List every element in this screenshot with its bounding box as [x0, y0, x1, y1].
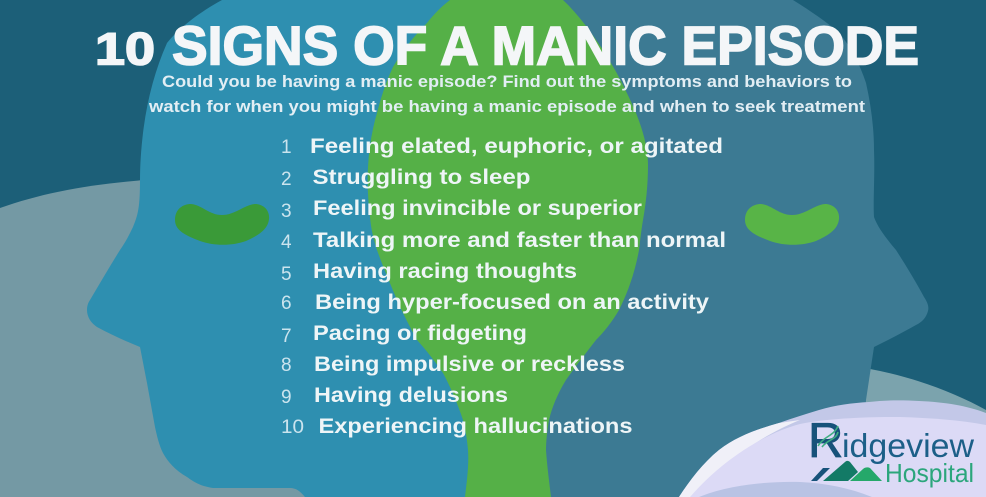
left head silhouette [87, 0, 470, 497]
list of signs: Experiencing hallucinations [318, 414, 633, 438]
list of signs: Being impulsive or reckless [314, 352, 625, 376]
left eye [175, 204, 269, 245]
list numbers: 5 [281, 264, 292, 285]
logo peak two [850, 467, 882, 481]
logo: Ridgeview Hospital [808, 414, 974, 488]
list of signs: Feeling elated, euphoric, or agitated [310, 134, 723, 158]
list numbers: 9 [281, 387, 292, 408]
list numbers: 1 [281, 137, 292, 158]
list numbers: 7 [281, 326, 292, 347]
green centre head overlap [368, 0, 648, 497]
list numbers: 2 [281, 169, 292, 190]
logo peak one [823, 461, 858, 481]
list of signs: Feeling invincible or superior [313, 196, 643, 220]
intro text: watch for when you might be having a manic episode and when to seek treatment [148, 97, 865, 116]
list numbers: 6 [281, 293, 292, 314]
title number: 10 [95, 24, 155, 74]
list numbers [281, 137, 304, 438]
list numbers: 8 [281, 355, 292, 376]
list numbers: 10 [281, 417, 304, 438]
intro text [148, 72, 865, 116]
right head silhouette [500, 0, 928, 497]
logo wordmark: idgeview [842, 427, 974, 464]
logo backdrop curves [679, 400, 986, 497]
logo letter R: R [808, 414, 843, 468]
list numbers: 4 [281, 232, 292, 253]
title words: SIGNS OF A MANIC EPISODE [172, 14, 919, 76]
logo swoosh [818, 426, 838, 447]
list of signs [310, 134, 726, 438]
logo subtitle: Hospital [885, 458, 974, 488]
intro text: Could you be having a manic episode? Find out the symptoms and behaviors to [162, 72, 852, 91]
right eye [745, 204, 839, 245]
left shoulder [0, 179, 330, 497]
logo dark stripe [811, 468, 830, 481]
right shoulder [850, 366, 986, 497]
list of signs: Having racing thoughts [313, 259, 577, 283]
list of signs: Pacing or fidgeting [313, 321, 527, 345]
list of signs: Being hyper-focused on an activity [315, 290, 709, 314]
title [95, 14, 919, 76]
list of signs: Talking more and faster than normal [313, 228, 726, 252]
list numbers: 3 [281, 201, 292, 222]
list of signs: Struggling to sleep [312, 165, 530, 189]
list of signs: Having delusions [314, 383, 508, 407]
